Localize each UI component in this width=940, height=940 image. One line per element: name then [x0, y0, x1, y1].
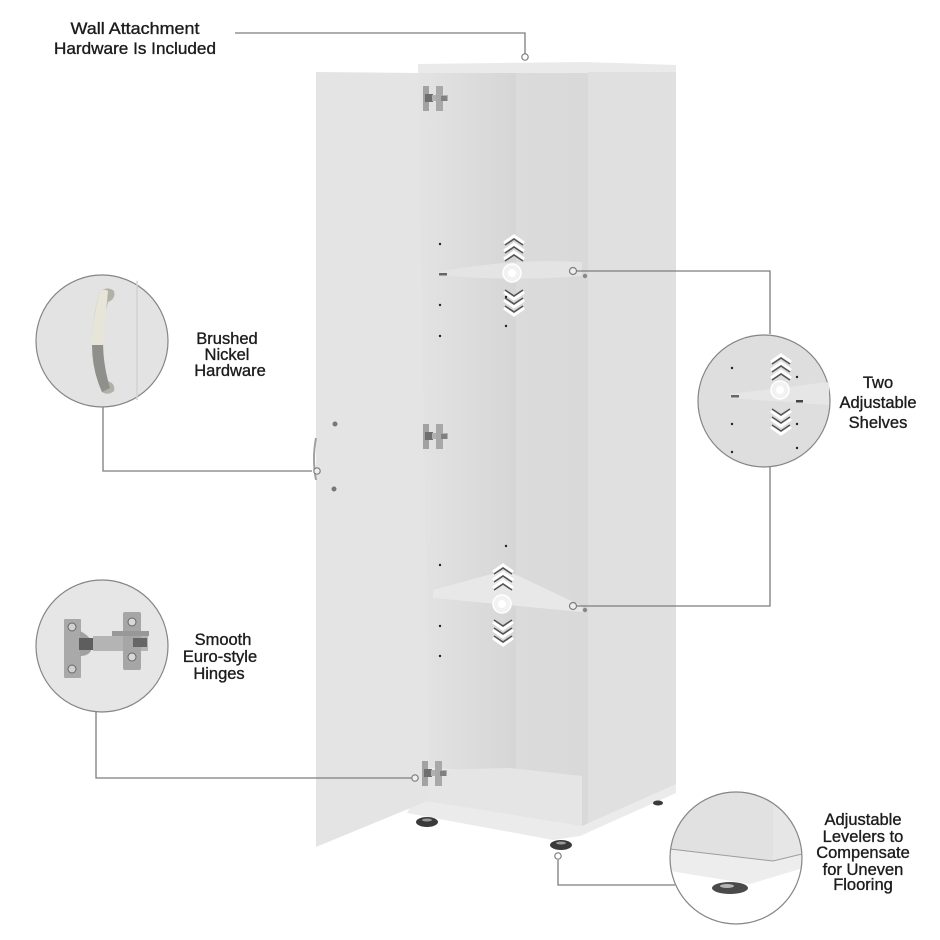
- levelers: [416, 800, 663, 850]
- label: levelers: for Uneven: [823, 861, 903, 879]
- label: brushed nickel: Nickel: [205, 346, 249, 364]
- cabinet top panel: [418, 62, 676, 73]
- callout circle: euro hinge: [36, 580, 168, 712]
- label: brushed nickel: Hardware: [194, 362, 266, 380]
- leader: leveler: [555, 853, 675, 885]
- leader: wall hardware: [235, 33, 528, 60]
- leader: handle: [103, 407, 320, 474]
- lower shelf: [433, 570, 582, 612]
- label: hinges: Euro-style: [183, 648, 257, 666]
- label: shelves: Adjustable: [839, 394, 917, 412]
- cabinet right side: [588, 72, 676, 826]
- upper shelf: [438, 261, 582, 279]
- label: shelves: Two: [863, 374, 893, 392]
- label: levelers: Compensate: [816, 844, 910, 862]
- leader: shelves: [570, 268, 770, 612]
- label: levelers: Adjustable: [824, 811, 902, 829]
- label: shelves: Shelves: [849, 414, 907, 432]
- leader: hinge: [96, 712, 418, 781]
- label: levelers: Flooring: [833, 876, 893, 894]
- label: hinges: Hinges: [193, 665, 245, 683]
- callout circle: brushed nickel handle: [36, 275, 168, 407]
- cabinet: [314, 62, 676, 850]
- lower shelf arrows: [493, 565, 513, 645]
- hinges: [422, 86, 448, 786]
- label: wall attachment: Hardware Is Included: [54, 40, 216, 58]
- label: levelers: Levelers to: [823, 828, 903, 846]
- callout circle: leveler: [669, 791, 803, 925]
- shelf peg holes: [332, 243, 507, 657]
- upper shelf arrows: [503, 236, 524, 315]
- cabinet floor: [407, 768, 676, 840]
- callout circle: adjustable shelves: [698, 335, 830, 467]
- label: brushed nickel: Brushed: [196, 330, 258, 348]
- door handle edge: [314, 438, 316, 480]
- label: hinges: Smooth: [195, 631, 251, 649]
- label: wall attachment: Wall Attachment: [70, 20, 200, 38]
- door: [316, 72, 430, 847]
- cabinet interior back: [418, 72, 516, 812]
